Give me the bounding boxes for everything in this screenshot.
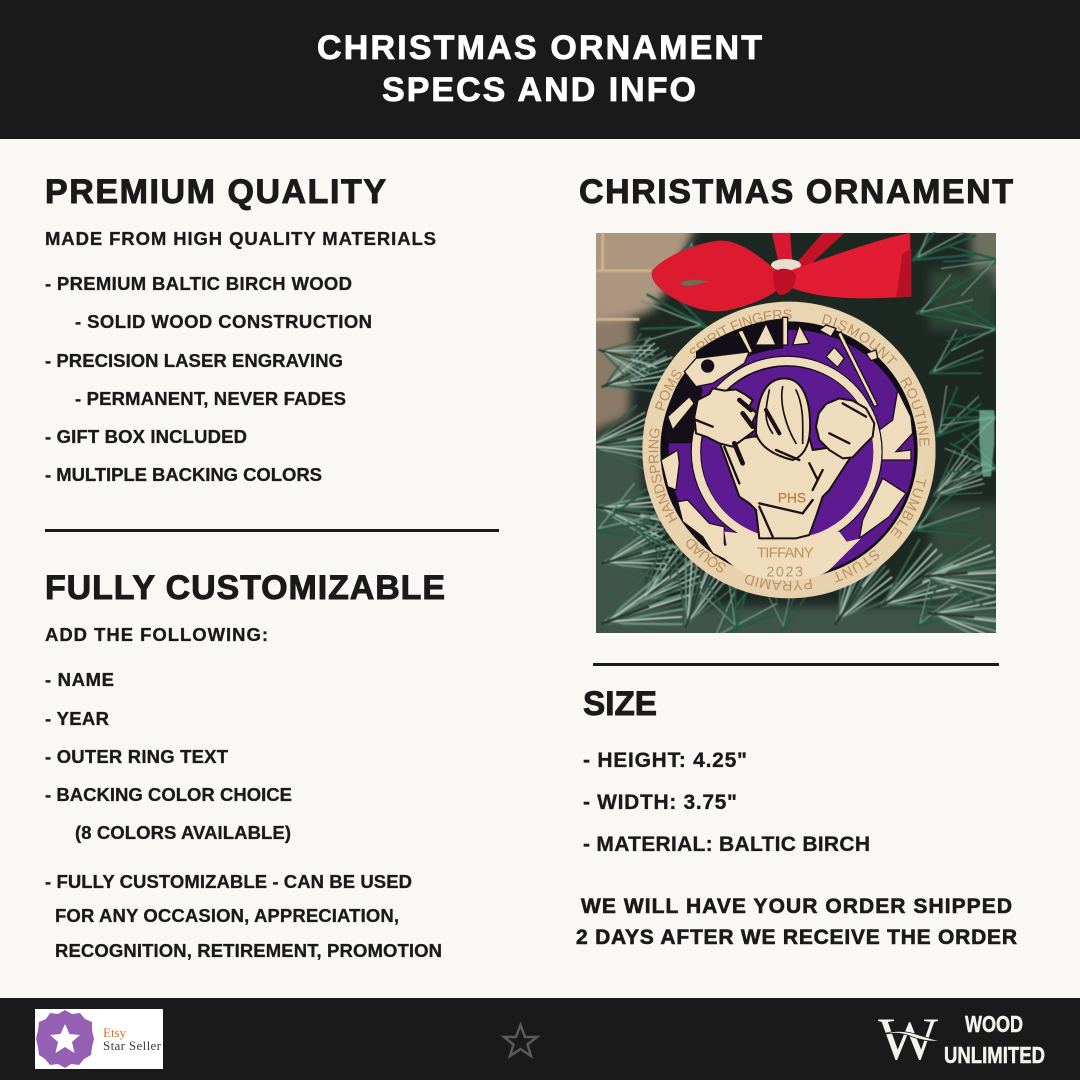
ring engraved words: POMS xyxy=(655,370,682,411)
heading: size: SIZE xyxy=(583,685,657,723)
ring engraved words: TUMBLE xyxy=(890,480,926,539)
title xyxy=(317,29,762,109)
cut-out scene ring xyxy=(660,321,918,579)
engraved name text: TIFFANY xyxy=(757,544,814,561)
left pompom xyxy=(694,388,757,447)
ring engraved words: SQUAD xyxy=(686,538,726,572)
text block: dimensions: - WIDTH: 3.75" xyxy=(583,791,737,814)
bottom wood mass xyxy=(716,532,861,580)
badge: etsy star seller: Etsy xyxy=(103,1025,127,1040)
ring engraved words: HANDSPRING xyxy=(648,428,678,524)
badge: etsy star seller: Star Seller xyxy=(103,1038,162,1053)
logo: wood unlimited: UNLIMITED xyxy=(944,1042,1045,1068)
text block: materials list: - PREMIUM BALTIC BIRCH WOOD xyxy=(45,273,352,294)
engraved name text: PHS xyxy=(778,491,806,506)
title: CHRISTMAS ORNAMENT xyxy=(317,29,762,67)
heading: premium quality: PREMIUM QUALITY xyxy=(45,173,386,211)
text block: customization list: RECOGNITION, RETIREMENT, PROMOTION xyxy=(55,940,442,961)
photo: ornament on pine branches xyxy=(596,232,996,633)
hand and bottle xyxy=(879,390,913,460)
christmas light xyxy=(979,410,994,477)
heading: christmas ornament: CHRISTMAS ORNAMENT xyxy=(579,173,1013,211)
text block: customization list: - BACKING COLOR CHOICE xyxy=(45,784,292,805)
logo: wood unlimited: W xyxy=(878,1006,938,1072)
panel: premium quality xyxy=(45,173,436,485)
ring engraved words: STUNT xyxy=(835,550,880,583)
text block: materials list: - SOLID WOOD CONSTRUCTION xyxy=(75,311,372,332)
right pompom xyxy=(816,398,874,458)
heading: fully customizable: FULLY CUSTOMIZABLE xyxy=(45,569,445,607)
ornament xyxy=(642,302,936,598)
ring engraved words: PYRAMID xyxy=(745,575,812,591)
sunburst xyxy=(755,317,809,345)
text block: customization list: (8 COLORS AVAILABLE) xyxy=(75,822,291,843)
ring engraved words: SPIRIT FINGERS xyxy=(690,309,792,358)
header band xyxy=(0,0,1080,139)
brick mortar xyxy=(596,233,651,319)
cone xyxy=(859,478,906,538)
text block: materials list: - PERMANENT, NEVER FADES xyxy=(75,388,346,409)
text block: customization list xyxy=(45,624,442,961)
ring engraved words: DISMOUNT xyxy=(822,314,898,364)
text block: dimensions xyxy=(583,749,870,856)
cheerleader figure xyxy=(694,378,874,538)
callout: shipping note: 2 DAYS AFTER WE RECEIVE THE ORDER xyxy=(576,926,1017,949)
title: SPECS AND INFO xyxy=(382,71,696,109)
text block: materials list xyxy=(45,228,436,485)
text block: materials list: - GIFT BOX INCLUDED xyxy=(45,426,247,447)
text block: customization list: FOR ANY OCCASION, APPRECIATION, xyxy=(55,905,399,926)
left pieces xyxy=(668,398,694,429)
baton and stars xyxy=(838,332,878,407)
text block: materials list: - PRECISION LASER ENGRAVING xyxy=(45,350,343,371)
torso arms skirt xyxy=(720,437,851,538)
figure engraved details xyxy=(696,387,866,537)
logo: wood unlimited xyxy=(878,1006,1045,1072)
badge: etsy star seller xyxy=(35,1009,163,1069)
footer band xyxy=(0,998,1080,1080)
ring engraved words: ROUTINE xyxy=(900,376,930,446)
ring engraved words xyxy=(648,309,930,591)
icon: purple star badge xyxy=(36,1010,94,1068)
text block: customization list: ADD THE FOLLOWING: xyxy=(45,624,268,645)
text block: customization list: - NAME xyxy=(45,669,114,690)
text block: customization list: - OUTER RING TEXT xyxy=(45,746,229,767)
ornament wooden disc xyxy=(642,302,936,598)
text block: materials list: MADE FROM HIGH QUALITY MATERIALS xyxy=(45,228,436,249)
callout: shipping note: WE WILL HAVE YOUR ORDER SHIPPED xyxy=(581,895,1012,918)
pine needles xyxy=(596,232,996,633)
panel: fully customizable xyxy=(45,569,445,961)
engraved name text xyxy=(757,491,814,581)
red ribbon bow xyxy=(652,233,911,311)
inner ring xyxy=(691,356,883,548)
text block: dimensions: - HEIGHT: 4.25" xyxy=(583,749,747,772)
text block: customization list: - FULLY CUSTOMIZABLE - CAN BE USED xyxy=(45,871,412,892)
hair xyxy=(756,378,810,460)
panel: size xyxy=(583,685,870,856)
backdrop tones xyxy=(596,233,996,633)
engraved name text: 2023 xyxy=(766,565,803,581)
megaphone xyxy=(684,352,749,387)
text block: materials list: - MULTIPLE BACKING COLORS xyxy=(45,464,322,485)
icon: outline star xyxy=(504,1025,537,1056)
callout: shipping note xyxy=(576,895,1017,949)
cut-out scene wood pieces xyxy=(661,317,913,563)
text block: customization list: - YEAR xyxy=(45,708,109,729)
logo: wood unlimited: WOOD xyxy=(965,1011,1023,1037)
text block: dimensions: - MATERIAL: BALTIC BIRCH xyxy=(583,833,870,856)
